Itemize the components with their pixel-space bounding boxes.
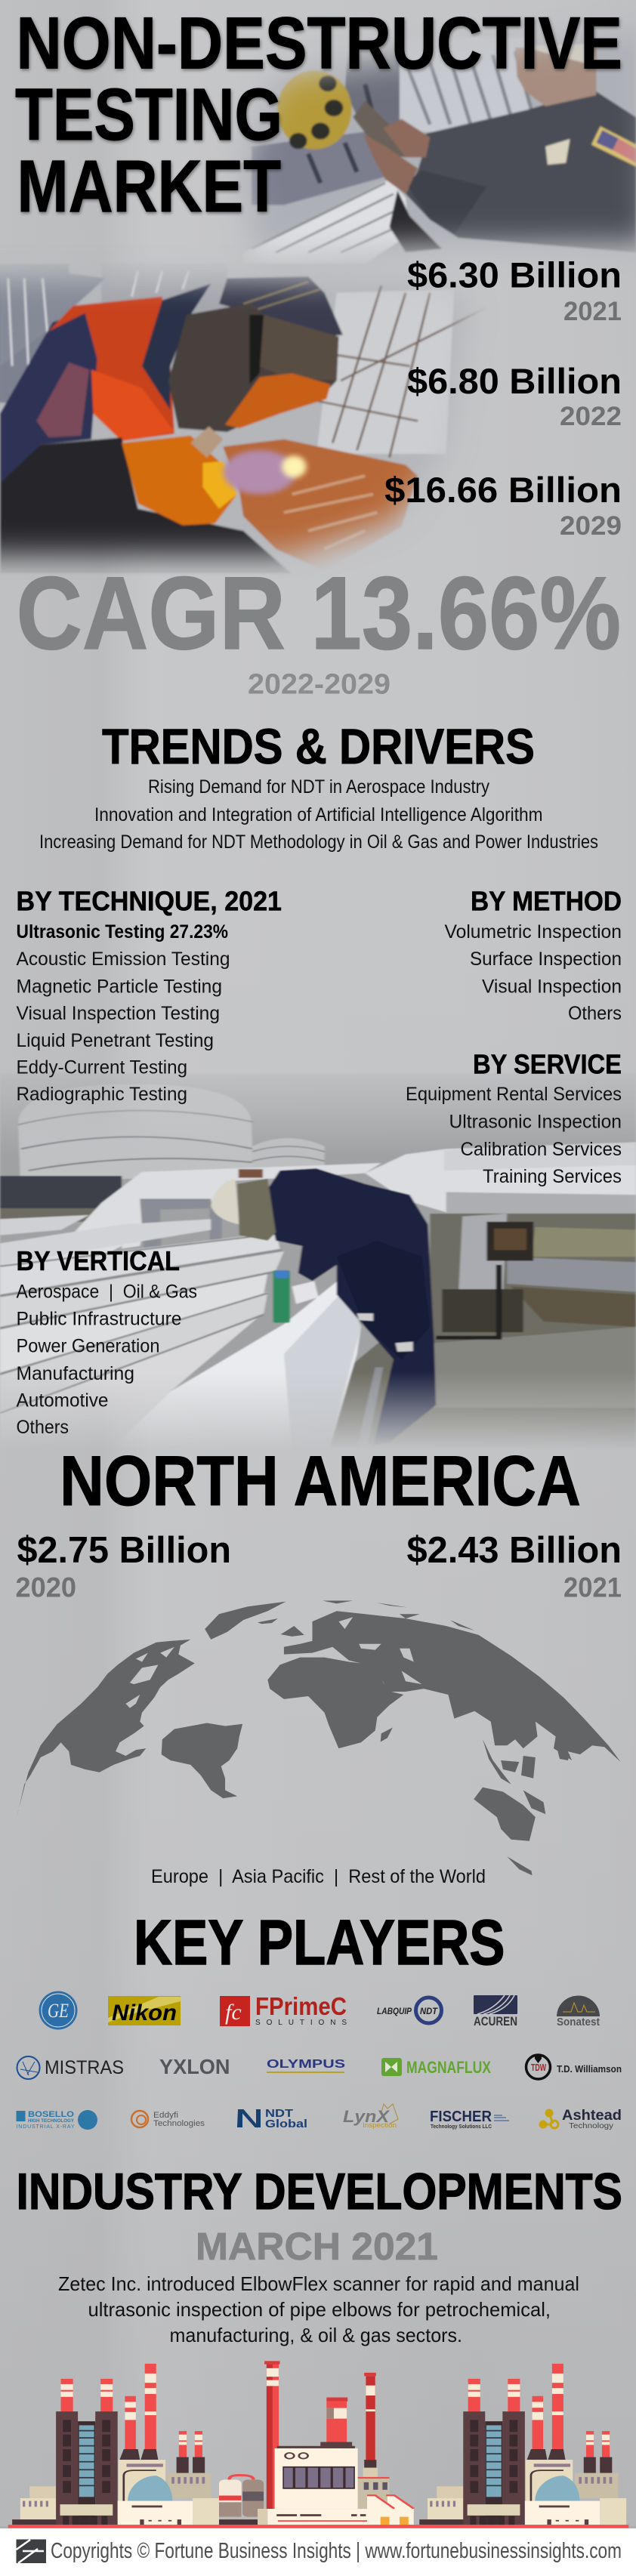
logo: FPrimeC: fc [225, 2000, 242, 2025]
factory illustration [8, 2361, 628, 2528]
by method list: Surface Inspection [470, 949, 622, 970]
by method list: BY METHOD [471, 885, 622, 917]
logo: Bosello: HIGH TECHNOLOGY [28, 2119, 74, 2124]
north america stats: $2.43 Billion [406, 1530, 622, 1571]
logo: Labquip NDT: LABQUIP [377, 2006, 412, 2016]
logo: T.D. Williamson: TDW [531, 2062, 546, 2073]
development description [58, 2272, 579, 2346]
by vertical list: BY VERTICAL [17, 1245, 180, 1276]
logo: Mistras [17, 2056, 124, 2079]
by method list [444, 885, 622, 1024]
trends and drivers: TRENDS & DRIVERS [102, 718, 535, 774]
by vertical list: Manufacturing [17, 1363, 134, 1384]
trends and drivers [39, 718, 598, 853]
by method list: Visual Inspection [482, 976, 622, 997]
logo: Yxlon: YXLON [159, 2055, 230, 2078]
right factory block [419, 2364, 626, 2525]
logo: T.D. Williamson: T.D. Williamson [557, 2063, 622, 2075]
market size stats: 2021 [563, 297, 622, 326]
by method list: Volumetric Inspection [444, 921, 622, 942]
logo: Mistras: MISTRAS [45, 2057, 124, 2078]
north america stats: 2021 [563, 1572, 622, 1603]
logo: Magnaflux: MAGNAFLUX [406, 2058, 491, 2077]
key players heading: KEY PLAYERS [134, 1907, 505, 1978]
logo: Fischer: FISCHER [430, 2109, 492, 2125]
by service list: Calibration Services [461, 1139, 622, 1160]
north america stats [15, 1530, 622, 1603]
north america stats: 2020 [15, 1572, 76, 1603]
logo: NDT Global: NDT [265, 2107, 293, 2120]
logo: Fischer [430, 2109, 509, 2130]
world map [16, 1600, 621, 1875]
development description: manufacturing, & oil & gas sectors. [169, 2324, 462, 2346]
title [15, 2, 622, 227]
market size stats: $16.66 Billion [384, 470, 622, 510]
regions caption: Europe | Asia Pacific | Rest of the World [151, 1866, 486, 1887]
by technique list [17, 885, 282, 1105]
logo: Olympus: OLYMPUS [267, 2058, 345, 2071]
development description: ultrasonic inspection of pipe elbows for petrochemical, [88, 2298, 551, 2321]
logo: T.D. Williamson [526, 2054, 622, 2079]
center factory [219, 2361, 414, 2525]
by vertical list: Aerospace | Oil & Gas [17, 1281, 197, 1302]
by service list: BY SERVICE [473, 1048, 622, 1080]
logo: GE [39, 1991, 77, 2030]
logo: Magnaflux [381, 2058, 491, 2077]
logo: LynX Inspection [343, 2104, 398, 2129]
title: MARKET [17, 145, 281, 227]
logo: LynX Inspection: Inspection [363, 2121, 397, 2129]
logo: Ashtead: Technology [569, 2122, 613, 2130]
by vertical list: Others [17, 1417, 69, 1438]
key player logos [17, 1991, 622, 2130]
logo: Fischer: Technology Solutions LLC [431, 2124, 492, 2130]
by technique list: Radiographic Testing [17, 1084, 187, 1105]
market size stats: $6.80 Billion [407, 361, 622, 401]
logo: FPrimeC [220, 1992, 347, 2027]
by vertical list: Power Generation [17, 1335, 160, 1356]
logo: Eddyfi: Eddyfi [153, 2111, 178, 2120]
logo: NDT Global [238, 2107, 307, 2130]
market size stats: 2022 [560, 402, 622, 431]
logo: Sonatest [557, 1996, 600, 2028]
logo: FPrimeC: FPrimeC [255, 1992, 347, 2020]
CAGR heading: 2022-2029 [248, 669, 391, 701]
photo: inspector with scanner [239, 32, 636, 260]
by vertical list [17, 1245, 197, 1438]
logo: GE: GE [48, 2000, 69, 2022]
logo: Bosello: INDUSTRIAL X-RAY [17, 2124, 75, 2130]
development description: Zetec Inc. introduced ElbowFlex scanner for rapid and manual [58, 2272, 579, 2295]
by technique list: Liquid Penetrant Testing [17, 1030, 214, 1051]
logo: Ashtead [539, 2108, 622, 2130]
by service list: Ultrasonic Inspection [449, 1112, 622, 1133]
logo: Labquip NDT: NDT [420, 2006, 439, 2016]
by technique list: Ultrasonic Testing 27.23% [17, 921, 228, 942]
by technique list: Magnetic Particle Testing [17, 976, 222, 997]
market size stats [384, 255, 622, 541]
development date: MARCH 2021 [196, 2225, 438, 2268]
market size stats: 2029 [560, 511, 622, 541]
by method list: Others [568, 1003, 622, 1024]
logo: Olympus [267, 2058, 345, 2073]
logo: Bosello [17, 2110, 97, 2130]
footer bar [0, 2528, 636, 2576]
market size stats: $6.30 Billion [407, 255, 622, 295]
logo: Ashtead: Ashtead [562, 2108, 622, 2124]
title: TESTING [15, 73, 282, 156]
by vertical list: Public Infrastructure [17, 1308, 181, 1329]
footer logo [17, 2539, 46, 2563]
photo: pipeline inspector [0, 1073, 636, 1451]
logo: Labquip NDT [377, 1998, 441, 2023]
left factory block [12, 2364, 219, 2525]
logo: FPrimeC: SOLUTIONS [255, 2019, 347, 2027]
logo: NDT Global: Global [265, 2118, 307, 2130]
by vertical list: Automotive [17, 1390, 109, 1411]
by service list: Training Services [483, 1166, 622, 1187]
photo: welder [0, 264, 482, 574]
by technique list: BY TECHNIQUE, 2021 [17, 885, 282, 917]
by technique list: Visual Inspection Testing [17, 1003, 220, 1024]
by service list [406, 1048, 622, 1187]
trends and drivers: Rising Demand for NDT in Aerospace Industry [148, 776, 489, 797]
trends and drivers: Innovation and Integration of Artificial Intelligence Algorithm [94, 804, 542, 825]
by service list: Equipment Rental Services [406, 1084, 622, 1105]
logo: Eddyfi: Technologies [153, 2119, 205, 2128]
logo: Eddyfi [131, 2111, 205, 2128]
by technique list: Acoustic Emission Testing [17, 949, 230, 970]
by technique list: Eddy-Current Testing [17, 1057, 187, 1078]
logo: Acuren [474, 1995, 517, 2028]
logo: Nikon: Nikon [112, 2001, 177, 2025]
logo: Bosello: BOSELLO [28, 2110, 75, 2119]
north america stats: $2.75 Billion [17, 1530, 231, 1571]
logo: LynX Inspection: LynX [343, 2107, 390, 2126]
logo: Acuren: ACUREN [474, 2014, 517, 2028]
logo: Sonatest: Sonatest [557, 2016, 600, 2028]
